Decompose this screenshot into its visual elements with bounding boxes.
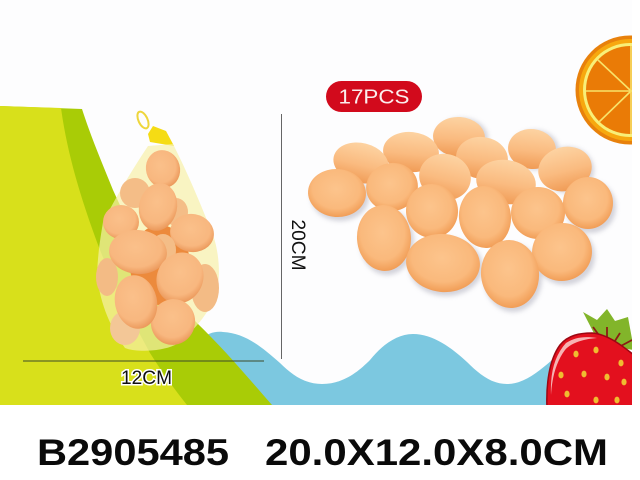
dimension: height line	[280, 114, 282, 359]
decoration: strawberry	[546, 309, 632, 405]
background: blue wave	[200, 332, 560, 405]
strawberry seeds	[558, 347, 627, 403]
strawberry leaves	[583, 309, 634, 350]
product code: B2905485	[37, 432, 229, 473]
strawberry body	[546, 332, 632, 405]
background: lime hill	[0, 106, 187, 405]
package dimensions: 20.0X12.0X8.0CM	[265, 432, 608, 473]
dimension label: 20CM: 20CM	[287, 219, 308, 271]
dimension label: 12CM: 12CM	[121, 368, 172, 389]
badge: 17PCS: 17PCS	[338, 86, 410, 108]
product: eggs in yellow net bag	[96, 110, 219, 351]
eggs inside net	[96, 146, 219, 351]
background: dark green hill	[0, 106, 272, 405]
strawberry stems	[593, 327, 632, 347]
decoration: orange slice	[576, 36, 632, 144]
net bag body	[97, 144, 219, 351]
strawberry highlight	[551, 337, 597, 395]
back row eggs	[329, 115, 597, 209]
dimension: width line	[23, 360, 264, 362]
eggs group: 17 pieces	[306, 115, 616, 312]
front row eggs	[306, 157, 613, 311]
net bag loop and tag	[135, 110, 174, 146]
egg shadows	[311, 118, 616, 312]
badge: 17PCS	[326, 81, 422, 112]
